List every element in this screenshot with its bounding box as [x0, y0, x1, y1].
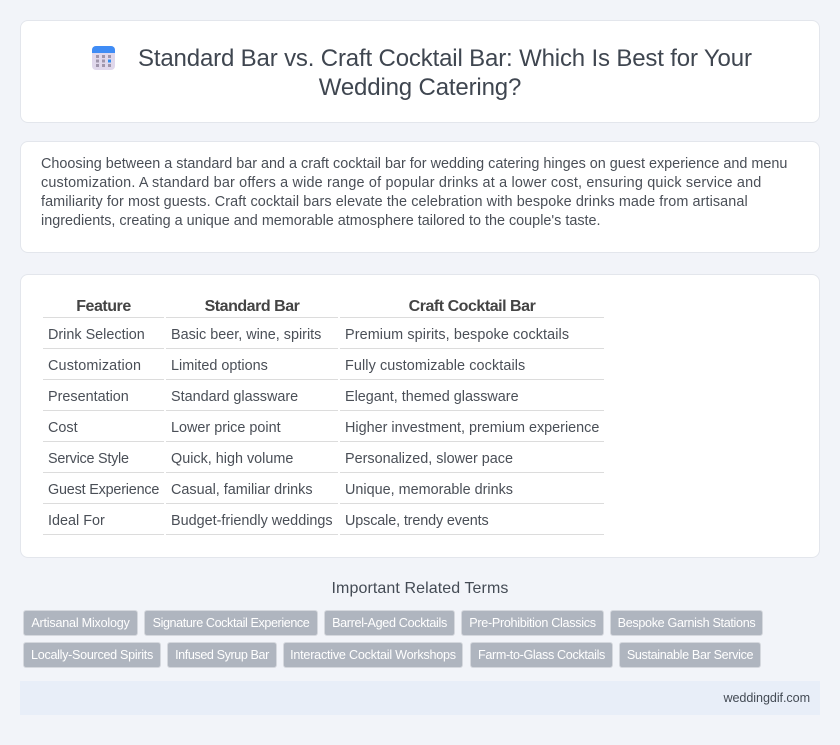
intro panel [20, 141, 820, 253]
tag list: Infused Syrup Bar [175, 648, 269, 662]
table header: craft cocktail bar: Craft Cocktail Bar [409, 298, 535, 315]
column: feature: Drink Selection [48, 327, 145, 343]
intro text: ingredients, creating a unique and memorable atmosphere tailored to the couple's taste. [41, 213, 601, 229]
title [138, 45, 752, 101]
column: craft cocktail bar: Elegant, themed glassware [345, 389, 519, 405]
column: craft cocktail bar: Upscale, trendy events [345, 513, 489, 529]
footer source: weddingdif.com [723, 691, 810, 705]
tag list: Sustainable Bar Service [627, 648, 753, 662]
column: feature: Customization [48, 358, 141, 374]
column: craft cocktail bar: Fully customizable cocktails [345, 358, 525, 374]
table header: feature: Feature [76, 298, 131, 315]
tag list: Barrel-Aged Cocktails [332, 616, 447, 630]
column: standard bar: Lower price point [171, 420, 281, 436]
tag list: Bespoke Garnish Stations [618, 616, 755, 630]
tag list: Farm-to-Glass Cocktails [478, 648, 605, 662]
table panel [20, 274, 820, 558]
header panel [20, 20, 820, 123]
column: standard bar [171, 327, 333, 529]
table header: standard bar: Standard Bar [205, 298, 299, 315]
intro text: customization. A standard bar offers a wide range of popular drinks at a lower cost, ensuring quick service and [41, 175, 761, 191]
tag list: Interactive Cocktail Workshops [290, 648, 456, 662]
column: craft cocktail bar [345, 327, 599, 529]
title: Wedding Catering? [319, 74, 521, 101]
column: craft cocktail bar: Unique, memorable drinks [345, 482, 513, 498]
footer bar [20, 681, 820, 715]
column: standard bar: Quick, high volume [171, 451, 293, 467]
column: standard bar: Basic beer, wine, spirits [171, 327, 321, 343]
tag list: Artisanal Mixology [31, 616, 130, 630]
tag list: Pre-Prohibition Classics [469, 616, 596, 630]
column: feature: Cost [48, 420, 78, 436]
icon: calendar [92, 46, 115, 70]
column: feature: Service Style [48, 451, 129, 467]
column: standard bar: Standard glassware [171, 389, 298, 405]
intro text: Choosing between a standard bar and a craft cocktail bar for wedding catering hinges on guest experience and menu [41, 156, 787, 172]
title: Standard Bar vs. Craft Cocktail Bar: Which Is Best for Your [138, 45, 752, 72]
tag list: Locally-Sourced Spirits [31, 648, 153, 662]
tag list: Signature Cocktail Experience [153, 616, 309, 630]
column: craft cocktail bar: Personalized, slower pace [345, 451, 513, 467]
column: standard bar: Casual, familiar drinks [171, 482, 313, 498]
column: feature: Ideal For [48, 513, 105, 529]
column: feature [48, 327, 159, 529]
column: feature: Presentation [48, 389, 129, 405]
column: craft cocktail bar: Higher investment, premium experience [345, 420, 599, 436]
related terms heading: Important Related Terms [332, 580, 508, 597]
column: feature: Guest Experience [48, 482, 159, 498]
intro text [41, 156, 787, 229]
column: standard bar: Budget-friendly weddings [171, 513, 333, 529]
intro text: familiarity for most guests. Craft cocktail bars elevate the celebration with bespoke drinks made from artisanal [41, 194, 748, 210]
comparison table [43, 317, 604, 535]
column: standard bar: Limited options [171, 358, 268, 374]
tag list [23, 610, 763, 668]
column: craft cocktail bar: Premium spirits, bespoke cocktails [345, 327, 569, 343]
